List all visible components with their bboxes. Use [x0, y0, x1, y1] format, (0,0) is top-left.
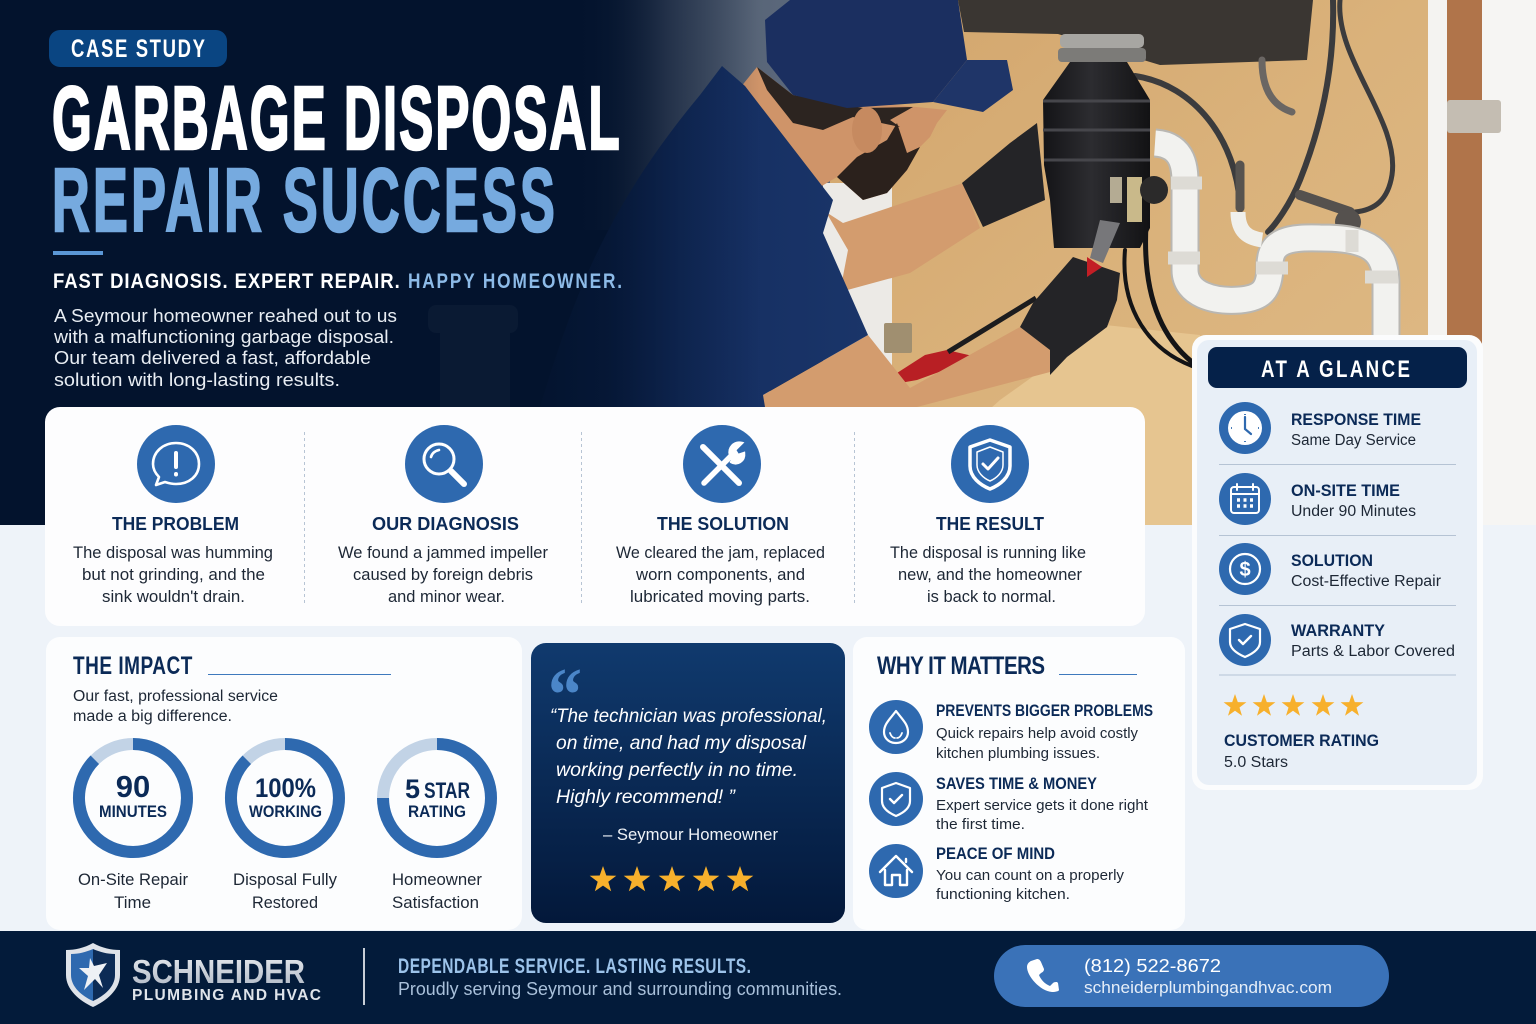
stat ring: 5 star rating: Satisfaction	[392, 893, 479, 912]
item: peace of mind: PEACE OF MIND	[936, 845, 1055, 863]
quote text: Highly recommend! ”	[556, 786, 736, 808]
stat ring: 100% working: WORKING	[249, 802, 322, 821]
door frame	[1428, 0, 1536, 525]
impact intro	[73, 688, 278, 725]
step: the solution: THE SOLUTION	[657, 513, 789, 534]
stat ring: 90 minutes	[78, 744, 188, 912]
ghost disposal in shadow	[428, 305, 518, 407]
step: the solution: worn components, and	[635, 566, 805, 584]
step: the result: is back to normal.	[927, 588, 1056, 606]
stat ring: 90 minutes: MINUTES	[99, 802, 167, 821]
glance: warranty: WARRANTY	[1291, 622, 1385, 640]
footer slogan: DEPENDABLE SERVICE. LASTING RESULTS.	[398, 954, 751, 978]
stat ring: 5 star rating: Homeowner	[392, 870, 482, 889]
glance header: AT A GLANCE	[1261, 356, 1410, 383]
stat ring: 100% working	[231, 744, 339, 912]
glance: response time	[1219, 402, 1421, 454]
quote text: on time, and had my disposal	[556, 732, 807, 754]
main title: GARBAGE DISPOSAL	[52, 68, 620, 169]
red pliers on floor	[897, 298, 1036, 383]
impact heading: THE IMPACT	[73, 651, 193, 680]
glance: on-site time	[1219, 473, 1416, 525]
footer slogan: Proudly serving Seymour and surrounding communities.	[398, 979, 842, 999]
customer rating stars	[1224, 694, 1363, 716]
step: our diagnosis: and minor wear.	[388, 588, 505, 606]
technician gloves	[962, 123, 1120, 375]
intro paragraph	[53, 306, 397, 390]
item: peace of mind: functioning kitchen.	[936, 886, 1070, 903]
main title: REPAIR SUCCESS	[52, 149, 555, 251]
technician forearms	[763, 183, 1050, 407]
sink underside	[958, 0, 1313, 65]
stat ring: 90 minutes: 90	[116, 769, 150, 804]
quote text: “The technician was professional,	[550, 705, 827, 727]
step: our diagnosis: OUR DIAGNOSIS	[372, 513, 519, 534]
quote text	[550, 705, 827, 808]
technician head	[740, 67, 947, 200]
panel: case steps	[45, 407, 1145, 626]
item: peace of mind	[869, 844, 1125, 903]
item: prevents bigger problems: kitchen plumbing issues.	[936, 745, 1100, 762]
step: the result: THE RESULT	[936, 513, 1045, 534]
contact text: schneiderplumbingandhvac.com	[1084, 978, 1332, 997]
quote attribution: – Seymour Homeowner	[603, 826, 779, 844]
tagline: HAPPY HOMEOWNER.	[408, 271, 622, 293]
step: our diagnosis	[338, 425, 548, 606]
footer bar	[0, 931, 1536, 1024]
step: our diagnosis: We found a jammed impeller	[338, 544, 548, 562]
glance: on-site time: ON-SITE TIME	[1291, 482, 1400, 500]
step: the solution	[616, 425, 825, 606]
stat ring: 5 star rating: RATING	[408, 802, 466, 821]
metal bracket	[884, 323, 912, 353]
panel: testimonial quote	[531, 643, 845, 923]
case study badge: CASE STUDY	[71, 34, 205, 63]
cabinet floor	[860, 325, 1200, 525]
item: prevents bigger problems	[869, 700, 1153, 762]
icon: phone	[1027, 959, 1059, 992]
stat ring: 90 minutes: On-Site Repair	[78, 870, 188, 889]
step: the solution: lubricated moving parts.	[630, 588, 810, 606]
glance: on-site time: Under 90 Minutes	[1291, 503, 1416, 520]
customer rating text: 5.0 Stars	[1224, 754, 1288, 771]
garbage disposal unit	[1043, 34, 1168, 248]
intro paragraph: with a malfunctioning garbage disposal.	[53, 327, 394, 347]
panel: why it matters	[853, 637, 1185, 930]
left navy fade over photo	[0, 0, 760, 525]
glance: warranty	[1219, 614, 1455, 666]
panel: at a glance	[1192, 335, 1483, 790]
company name: SCHNEIDER	[132, 953, 305, 990]
white panel behind arm	[823, 183, 892, 407]
step: the problem: sink wouldn't drain.	[102, 588, 245, 606]
item: saves time and money: SAVES TIME & MONEY	[936, 775, 1097, 793]
why heading: WHY IT MATTERS	[877, 651, 1045, 679]
impact intro: Our fast, professional service	[73, 688, 278, 705]
item: prevents bigger problems: PREVENTS BIGGER PROBLEMS	[936, 702, 1153, 720]
stat ring: 100% working: 100%	[255, 773, 316, 803]
stat ring: 5 star rating: 5	[405, 774, 420, 804]
glance header	[1208, 347, 1467, 388]
item: saves time and money	[869, 772, 1149, 833]
contact text	[1084, 956, 1332, 997]
logo shield	[66, 943, 120, 1007]
company name: PLUMBING AND HVAC	[132, 987, 321, 1004]
glance: warranty: Parts & Labor Covered	[1291, 643, 1455, 660]
intro paragraph: solution with long-lasting results.	[54, 370, 340, 390]
glance: solution: SOLUTION	[1291, 552, 1373, 570]
panel: the impact	[46, 637, 522, 930]
item: prevents bigger problems: Quick repairs help avoid costly	[936, 725, 1138, 742]
title accent bar	[53, 251, 103, 255]
impact intro: made a big difference.	[73, 708, 232, 725]
step: the problem: but not grinding, and the	[82, 566, 265, 584]
contact text: (812) 522-8672	[1084, 956, 1221, 976]
step: the result: new, and the homeowner	[898, 566, 1082, 584]
case study badge	[49, 30, 227, 67]
customer rating text	[1224, 732, 1379, 771]
tagline: FAST DIAGNOSIS. EXPERT REPAIR.	[53, 270, 400, 293]
item: peace of mind: You can count on a properly	[936, 867, 1125, 884]
tagline	[53, 270, 622, 293]
glance: solution: $	[1239, 559, 1251, 581]
intro paragraph: Our team delivered a fast, affordable	[54, 348, 371, 368]
contact pill	[994, 945, 1389, 1007]
navy cap	[765, 0, 1013, 112]
step: the result	[890, 425, 1086, 606]
stat ring: 100% working: Restored	[252, 893, 318, 912]
cabinet in background	[580, 0, 830, 230]
white drain pipes	[1155, 143, 1398, 336]
hoses	[1124, 0, 1393, 366]
glance: response time: RESPONSE TIME	[1291, 411, 1421, 429]
stat ring: 100% working: Disposal Fully	[233, 870, 337, 889]
wood cabinet wall	[830, 0, 1430, 525]
step: the problem	[73, 425, 273, 606]
stat ring: 90 minutes: Time	[114, 893, 151, 912]
quote mark: “	[548, 653, 582, 737]
footer slogan	[398, 954, 842, 999]
item: saves time and money: the first time.	[936, 816, 1025, 833]
step: the solution: We cleared the jam, replaced	[616, 544, 825, 562]
hero photo: technician repairing disposal under sink	[0, 0, 1536, 525]
item: saves time and money: Expert service gets it done right	[936, 797, 1149, 814]
glance: solution: Cost-Effective Repair	[1291, 573, 1441, 590]
main title	[52, 68, 620, 251]
glance: response time: Same Day Service	[1291, 432, 1416, 449]
navy polo shirt	[540, 66, 868, 407]
quote stars	[590, 866, 753, 891]
glance: solution	[1219, 543, 1441, 595]
customer rating text: CUSTOMER RATING	[1224, 732, 1379, 750]
step: our diagnosis: caused by foreign debris	[353, 566, 533, 584]
step: the result: The disposal is running like	[890, 544, 1086, 562]
white sliver under sleeve	[730, 385, 770, 407]
quote text: working perfectly in no time.	[556, 759, 798, 781]
stat ring: 5 star rating: STAR	[424, 778, 470, 803]
intro paragraph: A Seymour homeowner reahed out to us	[54, 306, 397, 326]
step: the problem: The disposal was humming	[73, 544, 273, 562]
wrench	[1087, 220, 1120, 277]
stat ring: 5 star rating	[383, 744, 491, 912]
step: the problem: THE PROBLEM	[112, 513, 239, 534]
